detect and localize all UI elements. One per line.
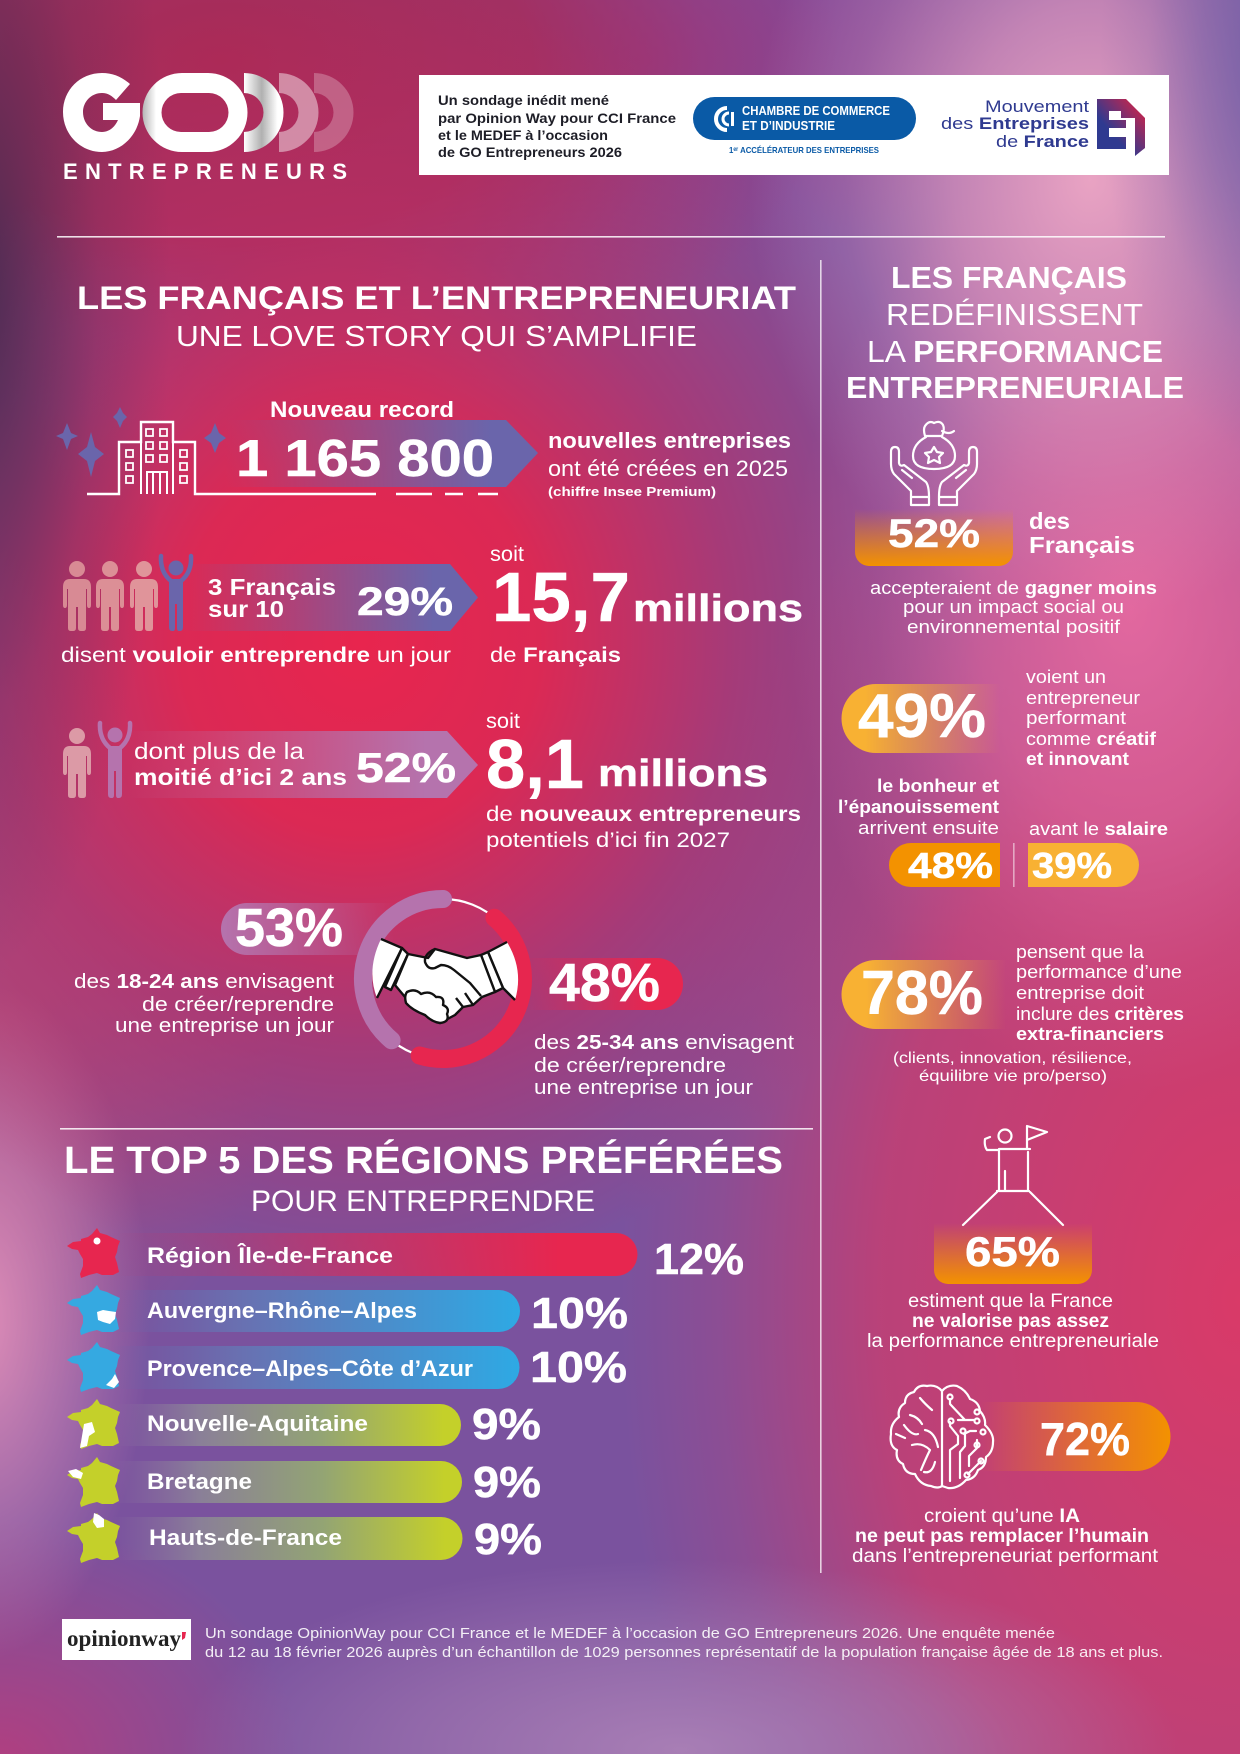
survey intro text: de GO Entrepreneurs 2026: [438, 145, 623, 160]
text: nouvelles entreprises: ont été créées en 2025: [548, 456, 788, 481]
stat: 52% gagner moins: accepteraient de gagner moins: [870, 578, 1157, 598]
bar: Bretagne 9%: Bretagne: [147, 1469, 252, 1494]
badge: 65%: [934, 1223, 1092, 1284]
footer: survey note: [205, 1626, 1163, 1661]
logo: CCI France: CHAMBRE DE COMMERCE: [742, 104, 890, 118]
stat: 78% critères extra-financiers: entreprise doit: [1016, 983, 1144, 1003]
icon: building and stars: [56, 407, 498, 494]
stat: 48% des 25-34 ans: une entreprise un jour: [534, 1077, 753, 1099]
icon: brain with circuit: [891, 1386, 993, 1488]
chart: handshake ring: [363, 899, 523, 1059]
panel: partners banner: [419, 75, 1169, 175]
stat: salaire 39%: avant le salaire: [1029, 819, 1168, 839]
stat: 65% ne valorise pas assez: ne valorise pas assez: [912, 1311, 1109, 1332]
bar: Bretagne 9%: [67, 1457, 541, 1507]
bar: Nouvelle-Aquitaine 9%: 9%: [472, 1400, 541, 1449]
stat: 72% IA: ne peut pas remplacer l’humain: [855, 1526, 1149, 1547]
stat: 48% des 25-34 ans: de créer/reprendre: [534, 1055, 726, 1077]
stat: 52% gagner moins: pour un impact social ou: [903, 597, 1124, 617]
stat: 49% créatif et innovant: performant: [1026, 708, 1126, 728]
icon: hands and money bag: [891, 422, 977, 505]
stat: 72% IA: dans l’entrepreneuriat performant: [852, 1546, 1159, 1567]
stat: 53% des 18-24 ans: des 18-24 ans envisagent: [74, 971, 334, 993]
arrow banner: 52%: moitié d’ici 2 ans: [134, 764, 347, 790]
stat: 78% critères extra-financiers: 78%: [861, 959, 983, 1028]
survey intro text: [438, 93, 677, 160]
stat: nouveau record: [56, 397, 791, 499]
logo: MEDEF: de France: [996, 132, 1089, 151]
figure: 8,1 millions: [486, 710, 801, 852]
stat: 78% critères extra-financiers: pensent que la: [1016, 942, 1145, 962]
stat: 49% créatif et innovant: comme créatif: [1026, 729, 1157, 749]
bar: Hauts-de-France 9%: Hauts-de-France: [149, 1525, 342, 1550]
heading: Les Français redéfinissent la performance: LES FRANÇAIS: [891, 260, 1127, 295]
logo: MEDEF: [941, 97, 1145, 156]
stat: 3 Français sur 10: disent vouloir entreprendre un jour: [61, 644, 451, 667]
bar: Provence-Alpes-Côte d'Azur 10%: 10%: [530, 1343, 627, 1392]
stat: 53% des 18-24 ans: [74, 898, 395, 1037]
bar: Hauts-de-France 9%: 9%: [474, 1515, 542, 1564]
badge: 52%: 52%: [888, 512, 980, 556]
bar: Bretagne 9%: 9%: [473, 1458, 541, 1507]
bar: Auvergne-Rhône-Alpes 10%: [67, 1285, 628, 1338]
survey intro text: Un sondage inédit mené: [438, 93, 610, 108]
stat: 78% critères extra-financiers: (clients, innovation, résilience,: [893, 1050, 1132, 1067]
heading: Le top 5 des régions préférées: [64, 1138, 783, 1218]
logo: OpinionWay: [62, 1619, 191, 1660]
stat: 65% ne valorise pas assez: estiment que la France: [908, 1291, 1113, 1312]
heading: Les Français redéfinissent la performance: LA PERFORMANCE: [867, 334, 1163, 369]
stat: 53% des 18-24 ans: une entreprise un jour: [115, 1015, 334, 1037]
arrow banner: 29%: sur 10: [208, 596, 284, 622]
heading: Les Français redéfinissent la performance: REDÉFINISSENT: [886, 297, 1143, 332]
logo: OpinionWay: opinionway: [67, 1626, 182, 1651]
stat: 49% créatif et innovant: 49%: [858, 682, 986, 751]
figure: 8,1 millions: 8,1: [486, 725, 584, 803]
badge: 52%: [855, 509, 1013, 566]
stat: 65% ne valorise pas assez: la performance entrepreneuriale: [867, 1331, 1159, 1352]
stat: 49% créatif et innovant: entrepreneur: [1026, 688, 1140, 708]
stat: 72% IA: croient qu’une IA: [924, 1506, 1080, 1527]
stat: 78% critères extra-financiers: équilibre vie pro/perso): [919, 1068, 1107, 1085]
heading: Le top 5 des régions préférées: LE TOP 5 DES RÉGIONS PRÉFÉRÉES: [64, 1138, 783, 1182]
stat: 48% des 25-34 ans: des 25-34 ans envisagent: [534, 1032, 794, 1054]
stat: salaire 39%: [1028, 819, 1168, 887]
stat: 49% créatif et innovant: et innovant: [1026, 749, 1129, 769]
stat: 78% critères extra-financiers: extra-financiers: [1016, 1024, 1164, 1044]
stat: 52% gagner moins: Français: [1029, 532, 1135, 558]
logo: MEDEF: Mouvement: [985, 97, 1089, 116]
figure: 15,7 millions: soit: [490, 543, 524, 566]
icon: handshake: [372, 939, 518, 1023]
arrow banner: 52%: dont plus de la: [134, 738, 304, 764]
text: nouvelles entreprises: nouvelles entreprises: [548, 428, 791, 453]
stat: 78% critères extra-financiers: performance d’une: [1016, 962, 1182, 982]
text: nouvelles entreprises: [548, 428, 791, 499]
stat: nouveau record: Nouveau record: [270, 397, 454, 422]
bar: Région Île-de-France 12%: Région Île-de-France: [147, 1243, 393, 1268]
logo: CCI France: 1ᵉʳ ACCÉLÉRATEUR DES ENTREPRISES: [729, 145, 879, 155]
bar: Région Île-de-France 12%: 12%: [654, 1235, 744, 1284]
arrow banner: 29%: [183, 564, 478, 631]
stat: bonheur 48%: l’épanouissement: [838, 797, 999, 817]
figure: 8,1 millions: potentiels d’ici fin 2027: [486, 829, 730, 852]
bar: Nouvelle-Aquitaine 9%: Nouvelle-Aquitaine: [147, 1411, 368, 1436]
stat: 52% gagner moins: des: [1029, 508, 1070, 534]
bar: Hauts-de-France 9%: [67, 1513, 542, 1564]
bar: Nouvelle-Aquitaine 9%: [67, 1399, 541, 1449]
stat: 78% critères extra-financiers: inclure des critères: [1016, 1004, 1184, 1024]
bar: Provence-Alpes-Côte d'Azur 10%: [67, 1342, 627, 1392]
survey intro text: par Opinion Way pour CCI France: [438, 111, 677, 126]
figure: 15,7 millions: [490, 543, 803, 667]
bar: Région Île-de-France 12%: [67, 1228, 744, 1284]
stat: bonheur 48%: 48%: [908, 845, 993, 886]
heading: Les Français redéfinissent la performance: ENTREPRENEURIALE: [846, 370, 1184, 405]
stat: 48% des 25-34 ans: 48%: [549, 953, 660, 1013]
bar: Auvergne-Rhône-Alpes 10%: 10%: [531, 1289, 628, 1338]
logo: CCI France: [693, 97, 916, 155]
bar chart: regions: [67, 1228, 744, 1564]
stat: moitié d'ici 2 ans: [63, 710, 801, 852]
stat: 65% ne valorise pas assez: [867, 1126, 1159, 1352]
heading: Les Français redéfinissent la performance: [846, 260, 1184, 405]
arrow banner: 52%: 52%: [356, 744, 456, 791]
arrow banner: 1 165 800: [225, 420, 538, 488]
stat: bonheur 48%: le bonheur et: [877, 776, 999, 796]
heading: Le top 5 des régions préférées: POUR ENTREPRENDRE: [251, 1185, 595, 1218]
survey intro text: et le MEDEF à l’occasion: [438, 128, 608, 143]
logo: GO Entrepreneurs: ENTREPRENEURS: [63, 159, 347, 184]
heading: Les Français et l'entrepreneuriat: UNE LOVE STORY QUI S’AMPLIFIE: [176, 321, 697, 353]
bar: Auvergne-Rhône-Alpes 10%: Auvergne–Rhône–Alpes: [147, 1298, 417, 1323]
icon: people: [63, 556, 191, 631]
figure: 8,1 millions: soit: [486, 710, 520, 733]
stat: 3 Français sur 10: [61, 543, 803, 667]
logo: CCI France: ET D’INDUSTRIE: [742, 119, 835, 133]
icon: two people: [63, 723, 130, 798]
stat: 52% gagner moins: environnemental positif: [907, 617, 1121, 637]
arrow banner: 29%: 29%: [357, 580, 453, 624]
stat: salaire 39%: 39%: [1032, 845, 1112, 886]
figure: 8,1 millions: de nouveaux entrepreneurs: [486, 803, 801, 826]
figure: 8,1 millions: millions: [598, 753, 768, 795]
badge: 72%: 72%: [1040, 1413, 1130, 1465]
arrow banner: 29%: 3 Français: [208, 574, 336, 600]
stat: 72% IA: [852, 1386, 1170, 1567]
stat: bonheur 48%: arrivent ensuite: [858, 818, 999, 838]
figure: 15,7 millions: de Français: [490, 644, 621, 667]
stat: 49% créatif et innovant: [842, 667, 1157, 769]
badge: 65%: 65%: [965, 1228, 1060, 1275]
stat: 52% gagner moins: [855, 422, 1157, 637]
stat: 48% des 25-34 ans: [520, 953, 794, 1099]
figure: 15,7 millions: 15,7: [492, 558, 630, 636]
arrow banner: 1 165 800: 1 165 800: [236, 430, 494, 488]
arrow banner: 52%: [128, 731, 478, 798]
icon: person with flag on summit: [963, 1126, 1063, 1225]
heading: Les Français et l'entrepreneuriat: LES FRANÇAIS ET L’ENTREPRENEURIAT: [77, 280, 797, 316]
logo: GO Entrepreneurs: [63, 73, 354, 184]
stat: 53% des 18-24 ans: 53%: [235, 898, 343, 958]
stat: 53% des 18-24 ans: de créer/reprendre: [142, 994, 334, 1016]
stat: 78% critères extra-financiers: [842, 942, 1184, 1085]
bar: Provence-Alpes-Côte d'Azur 10%: Provence–Alpes–Côte d’Azur: [147, 1356, 473, 1381]
footer: survey note: du 12 au 18 février 2026 auprès d’un échantillon de 1029 personnes représentatif de la population française âgée de 18 ans et plus.: [205, 1645, 1163, 1661]
heading: Les Français et l'entrepreneuriat: [77, 280, 797, 353]
logo: MEDEF: des Entreprises: [941, 114, 1089, 133]
figure: 15,7 millions: millions: [633, 588, 803, 630]
footer: survey note: Un sondage OpinionWay pour CCI France et le MEDEF à l’occasion de GO Entrepreneurs 2026. Une enquête menée: [205, 1626, 1055, 1642]
stat: bonheur 48%: [838, 776, 1000, 887]
badge: 72%: [980, 1402, 1170, 1471]
stat: 49% créatif et innovant: voient un: [1026, 667, 1106, 687]
text: nouvelles entreprises: (chiffre Insee Premium): [548, 485, 716, 499]
